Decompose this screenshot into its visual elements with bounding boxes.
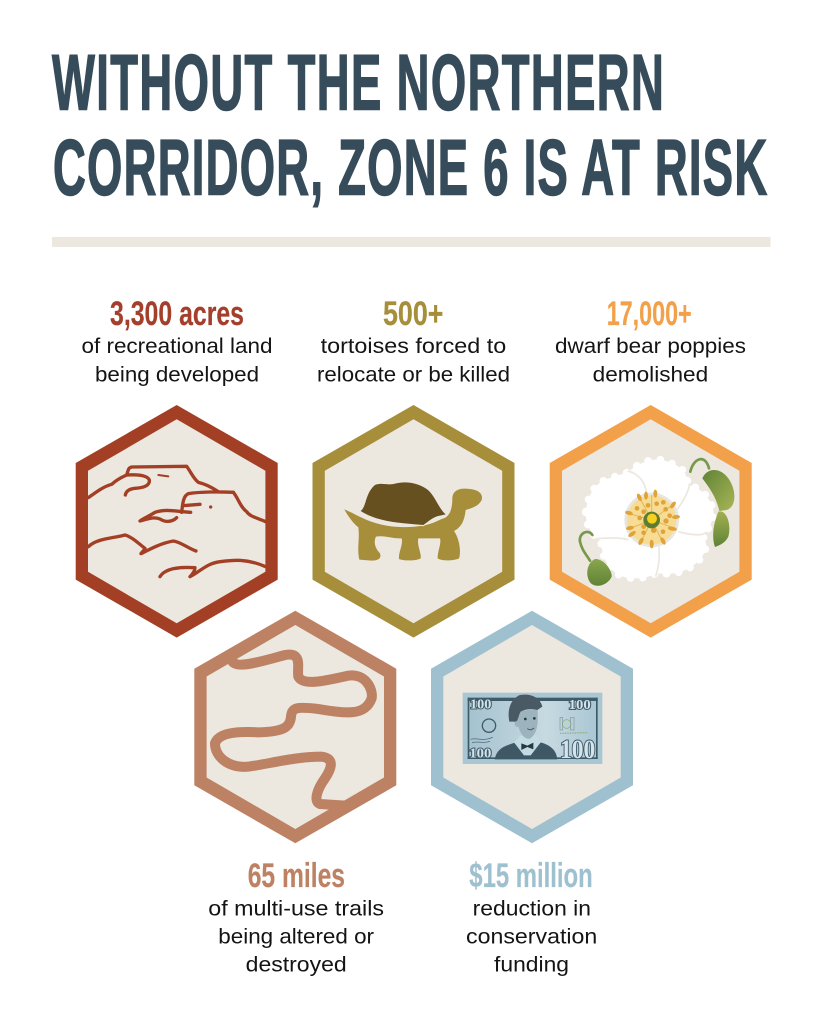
stat: 65 miles: of multi-use trails [208,898,384,921]
stat: $15 million: reduction in [473,898,591,921]
stat: 65 miles [208,857,384,977]
icon: 100 dollar bill: 100 [560,735,595,764]
stat: 17,000+ [555,295,746,386]
stat: 17,000+: 17,000+ [607,295,692,333]
stat: 3,300 acres: being developed [95,364,259,386]
icon: 100 dollar bill: 100 [469,745,492,760]
stat: 65 miles: being altered or [218,926,374,949]
stat: 500+ [317,295,510,386]
stat: 500+: 500+ [383,295,444,333]
title: CORRIDOR, ZONE 6 IS AT RISK [53,123,767,212]
icon: winding trail [215,655,372,806]
icon: 100 dollar bill: 100 [569,697,591,712]
stat: 65 miles: destroyed [246,954,347,977]
stat: 65 miles: 65 miles [248,857,345,895]
title: WITHOUT THE NORTHERN [52,38,664,127]
stat: 500+: relocate or be killed [317,364,510,386]
stat: $15 million: $15 million [469,857,593,895]
hexagon: conservation funding [431,611,633,843]
stat: 3,300 acres: 3,300 acres [110,295,244,333]
hexagon: poppy [550,405,752,638]
icon: tortoise [344,482,482,561]
title [52,38,767,212]
hexagon: trails [194,611,396,843]
hexagon: tortoise [312,405,514,638]
stat: 17,000+: demolished [593,364,708,386]
stat: $15 million: conservation [466,926,597,949]
hexagon: canyon land [76,405,278,638]
stat: $15 million [466,857,597,977]
stat: $15 million: funding [494,954,569,977]
icon: canyon mesas [88,466,266,577]
stat: 3,300 acres [82,295,272,386]
icon: 100 dollar bill [463,693,602,764]
stat: 500+: tortoises forced to [321,335,506,358]
stat: 17,000+: dwarf bear poppies [555,335,746,358]
icon: dwarf bear poppy [580,459,734,586]
stat: 3,300 acres: of recreational land [82,335,272,358]
icon: 100 dollar bill: 100 [470,696,492,711]
